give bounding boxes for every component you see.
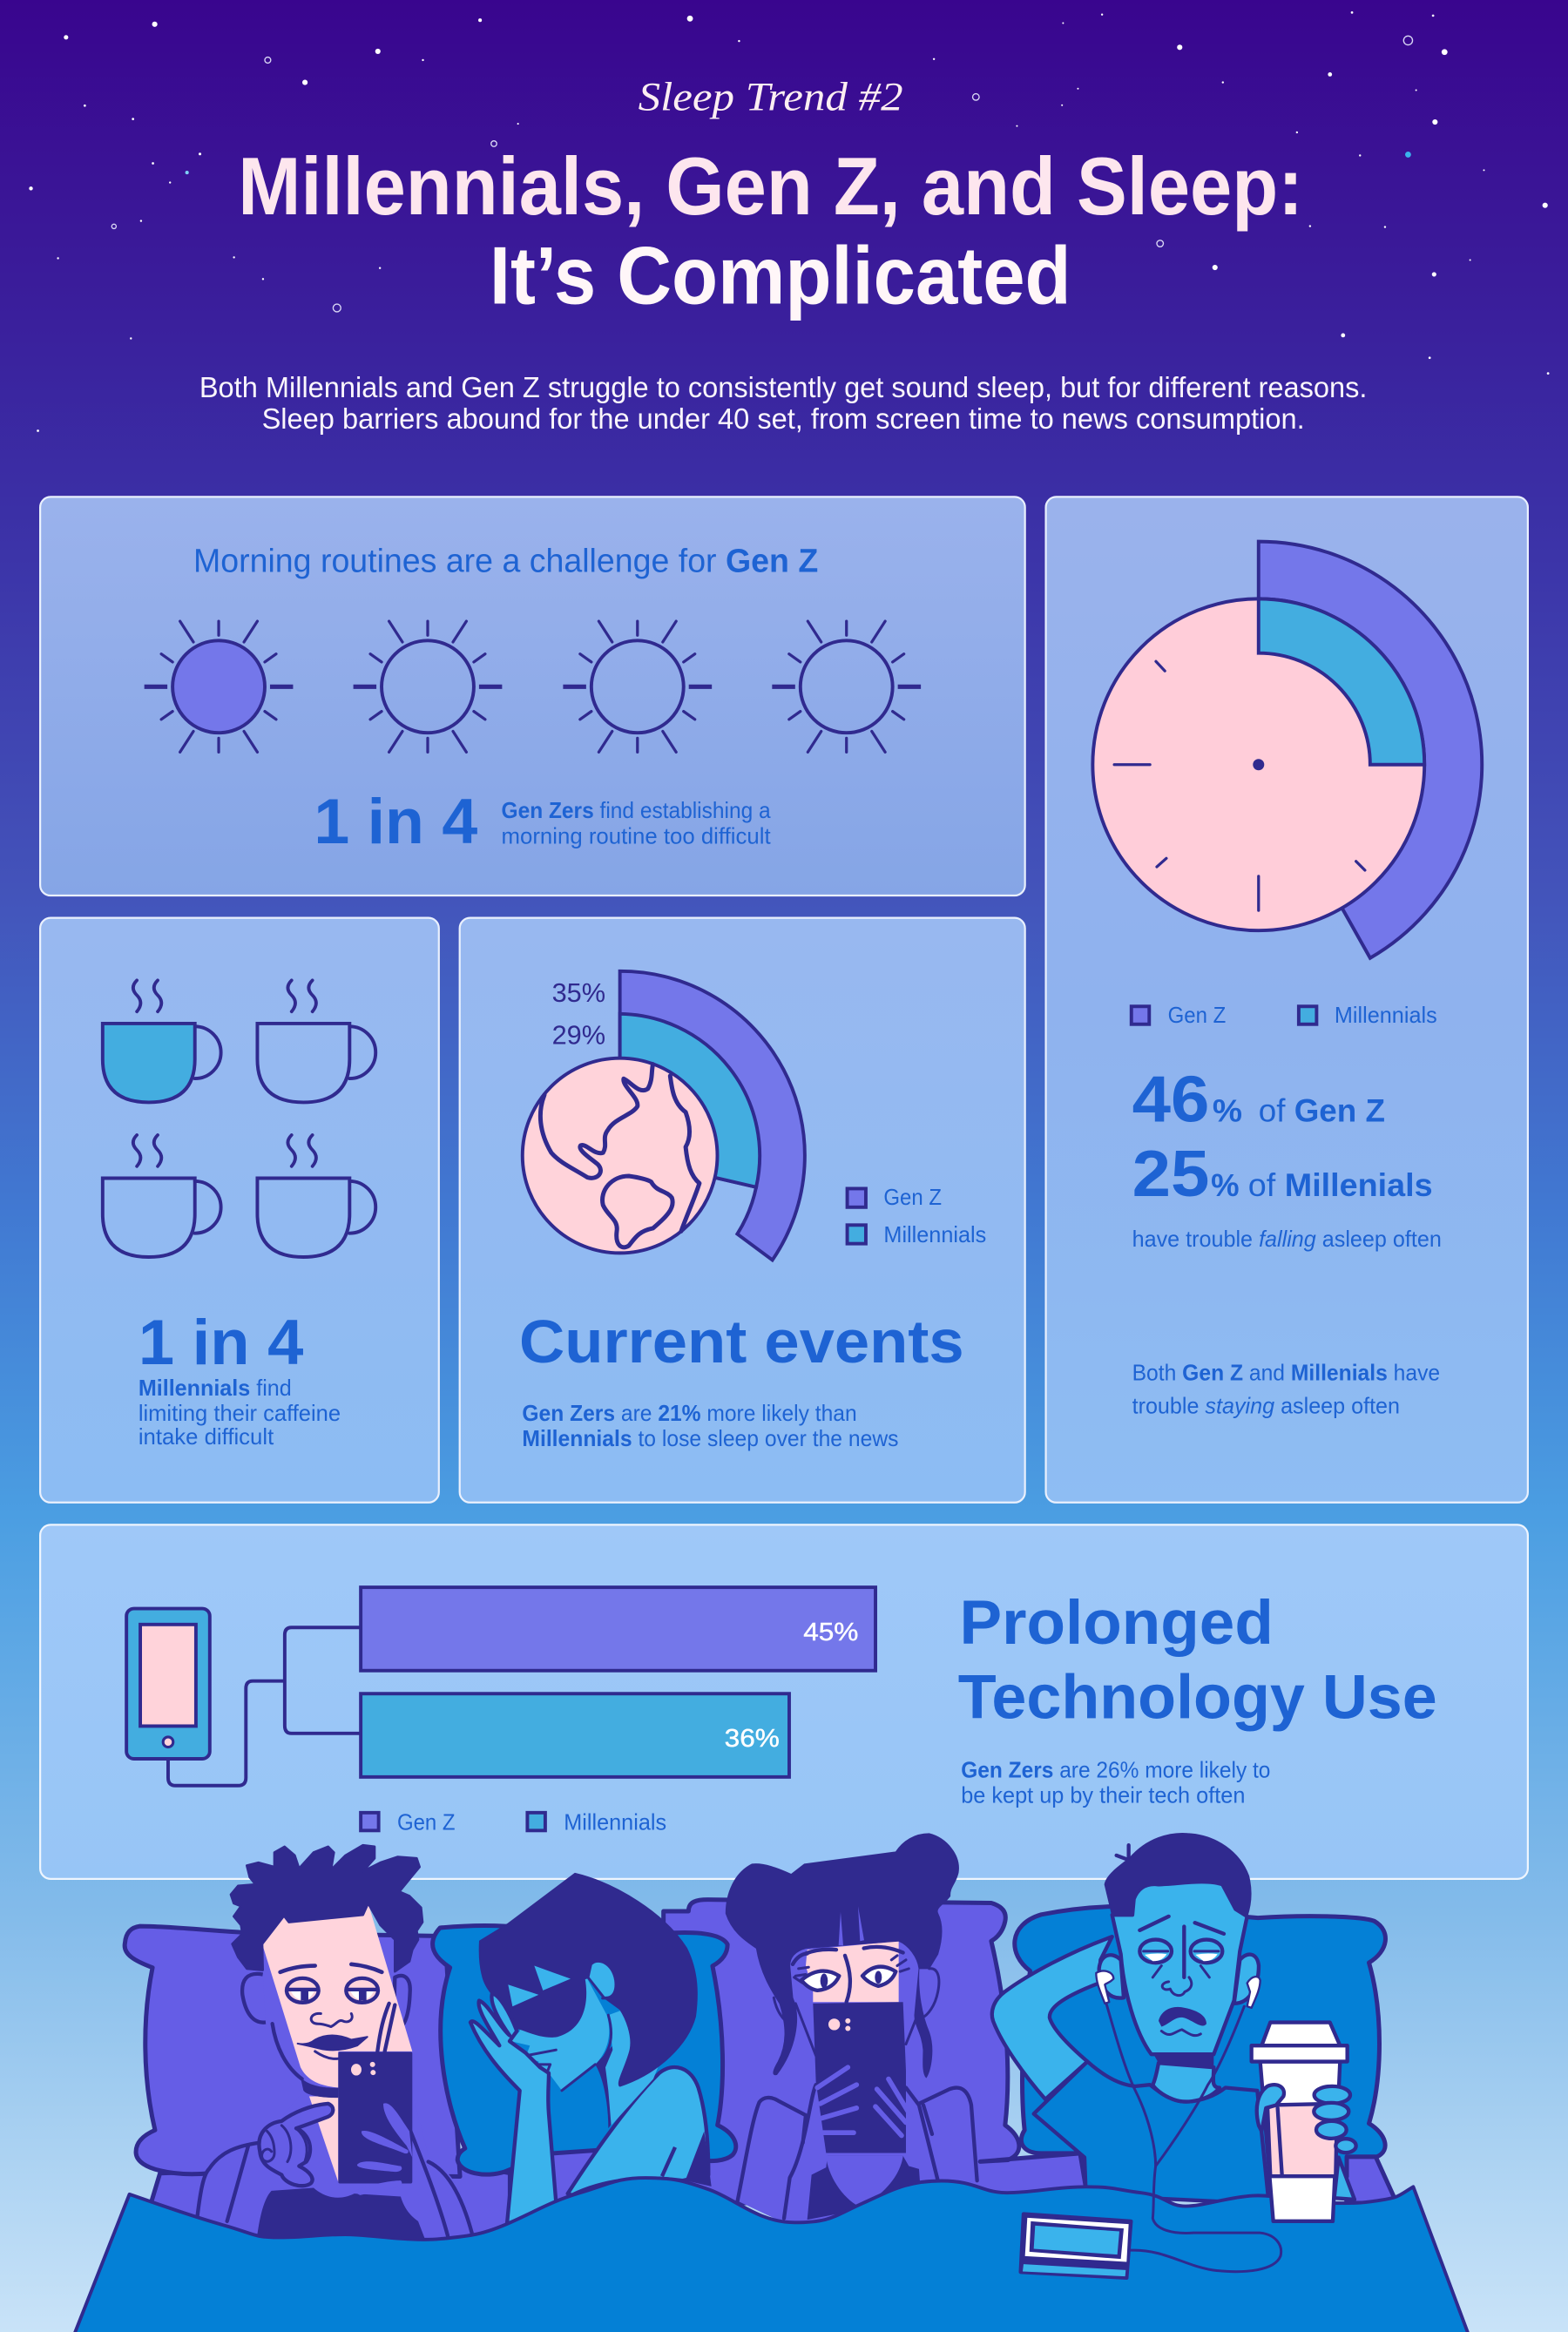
intro text: Sleep barriers abound for the under 40 set, from screen time to news consumption. (262, 403, 1305, 436)
title: It’s Complicated (490, 229, 1071, 321)
panel: prolonged technology use (40, 1524, 1528, 1879)
chart: clock radial (1092, 542, 1482, 958)
stat caption (502, 799, 771, 848)
caption (961, 1759, 1270, 1808)
person: woman with buns and phone (726, 1834, 977, 2227)
chart: globe radial (523, 971, 805, 1260)
legend: Gen Z (883, 1186, 942, 1210)
person: woman with sleep mask (470, 1874, 712, 2227)
pillows and bedding, right half (664, 1900, 1396, 2203)
person: man with phone (198, 1845, 476, 2245)
panel: morning routines (40, 497, 1025, 896)
coffee cup and hand (1252, 2023, 1356, 2221)
heading: prolonged technology use: Prolonged (960, 1588, 1274, 1658)
stat caption: limiting their caffeine (139, 1402, 341, 1426)
stat caption: morning routine too difficult (502, 824, 771, 848)
icon row: four suns, one filled (145, 621, 921, 752)
starfield (29, 11, 1549, 432)
stat: 1 in 4: 1 in 4 (139, 1307, 304, 1378)
earphone cords and music player (1021, 2004, 1281, 2278)
stat caption: Gen Zers find establishing a (502, 799, 771, 823)
caption: staying asleep: Both Gen Z and Millenials have (1132, 1362, 1440, 1386)
panel: falling asleep clock (1046, 497, 1528, 1503)
panel: caffeine (40, 918, 439, 1503)
stat: 46% of Gen Z: of Gen Z (1259, 1093, 1385, 1129)
legend: Gen Z (397, 1810, 456, 1835)
intro text: Both Millennials and Gen Z struggle to consistently get sound sleep, but for different reasons. (199, 372, 1367, 404)
chart labels: 35% and 29%: 35% (552, 977, 605, 1008)
legend (848, 1186, 986, 1247)
illustration: people in bed (74, 1834, 1469, 2332)
legend: Millennials (1335, 1004, 1437, 1028)
pillows and bedding, left half (125, 1926, 736, 2240)
intro text (199, 372, 1367, 436)
caption: staying asleep: trouble staying asleep often (1132, 1394, 1400, 1418)
stat caption: Millennials find (139, 1376, 292, 1401)
caption: Gen Zers are 26% more likely to (961, 1759, 1270, 1783)
caption: Millennials to lose sleep over the news (522, 1427, 898, 1451)
person: man with earbuds and coffee (992, 1834, 1269, 2204)
bar chart (361, 1587, 875, 1777)
stat: 25% of Millenials: 25 (1132, 1137, 1209, 1210)
stat: 25% of Millenials: of Millenials (1248, 1167, 1433, 1203)
chart labels: 35% and 29% (552, 977, 605, 1050)
stat caption (139, 1376, 341, 1450)
legend (361, 1810, 666, 1835)
caption (522, 1402, 898, 1451)
icon: phone with cable (126, 1609, 360, 1786)
blanket (74, 2178, 1469, 2332)
stat: 46% of Gen Z: % (1213, 1094, 1242, 1129)
bar chart: 45% (803, 1619, 858, 1646)
caption: staying asleep (1132, 1362, 1440, 1418)
heading: current events: Current events (519, 1308, 964, 1376)
heading: prolonged technology use (958, 1588, 1437, 1732)
legend (1132, 1004, 1437, 1028)
icon row: four coffee cups, one filled (103, 980, 375, 1257)
kicker: Sleep Trend #2: Sleep Trend #2 (639, 74, 903, 118)
stat: 46% of Gen Z: 46 (1132, 1063, 1209, 1136)
stat: 1 in 4: 1 in 4 (314, 786, 477, 857)
legend: Millennials (883, 1223, 986, 1247)
legend: Millennials (564, 1810, 666, 1835)
title: Millennials, Gen Z, and Sleep: (238, 140, 1303, 232)
heading: morning routines: Morning routines are a challenge for Gen Z (193, 543, 818, 579)
panel: current events (460, 918, 1025, 1503)
stat: 46% of Gen Z (1132, 1063, 1385, 1136)
stat caption: intake difficult (139, 1425, 274, 1450)
chart labels: 35% and 29%: 29% (552, 1019, 605, 1050)
caption: Gen Zers are 21% more likely than (522, 1402, 857, 1426)
stat: 25% of Millenials (1132, 1137, 1433, 1210)
title (238, 140, 1303, 321)
legend: Gen Z (1168, 1004, 1226, 1028)
caption: falling asleep: have trouble falling asleep often (1132, 1227, 1442, 1252)
heading: prolonged technology use: Technology Use (958, 1662, 1437, 1732)
stat: 25% of Millenials: % (1211, 1168, 1240, 1203)
caption: be kept up by their tech often (961, 1784, 1245, 1808)
bar chart: 36% (725, 1725, 780, 1753)
